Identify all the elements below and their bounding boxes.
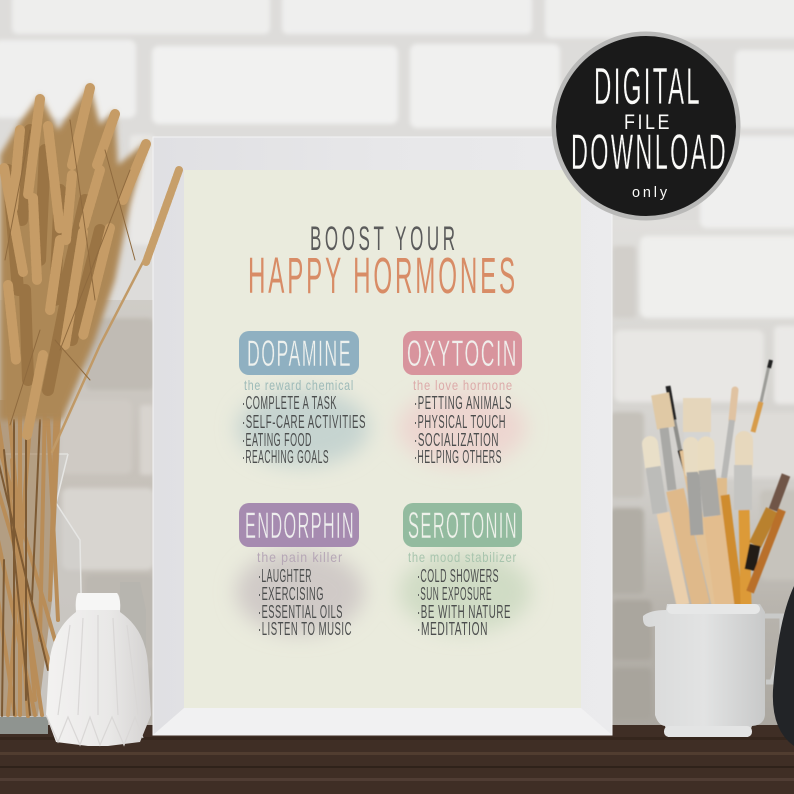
panel: dopamine: ·SELF-CARE ACTIVITIES [242, 412, 366, 432]
panel: dopamine: the reward chemical [244, 377, 354, 393]
panel: dopamine [239, 331, 366, 467]
panel: endorphin [239, 503, 359, 639]
panel: oxytocin: ·SOCIALIZATION [414, 430, 499, 450]
blurred colour blobs [236, 390, 531, 634]
badge: digital file download: FILE [624, 111, 672, 134]
dark vase [773, 586, 794, 746]
panel: oxytocin: ·HELPING OTHERS [414, 447, 502, 467]
panel: oxytocin: ·PHYSICAL TOUCH [414, 412, 506, 432]
panel: serotonin [403, 503, 522, 639]
panel: dopamine: ·EATING FOOD [242, 430, 312, 450]
badge: digital file download [552, 32, 740, 220]
panel: serotonin: ·SUN EXPOSURE [417, 584, 492, 604]
panel: oxytocin: the love hormone [413, 377, 513, 393]
badge: digital file download: only [632, 184, 670, 201]
glass vase [0, 454, 146, 734]
panel: serotonin: ·BE WITH NATURE [417, 602, 511, 622]
panel: endorphin: ·LAUGHTER [258, 566, 312, 586]
picture frame [153, 137, 612, 735]
panel: oxytocin [403, 331, 522, 467]
panel: dopamine: ·COMPLETE A TASK [242, 393, 337, 413]
title: Boost your: BOOST YOUR [310, 220, 459, 258]
panel: serotonin: ·MEDITATION [417, 619, 488, 639]
wheat stems [0, 262, 143, 716]
panel: serotonin: ·COLD SHOWERS [417, 566, 499, 586]
paint brushes [650, 360, 786, 605]
panel: oxytocin: OXYTOCIN [407, 333, 518, 374]
panel: endorphin: the pain killer [257, 549, 343, 565]
panel: dopamine: DOPAMINE [247, 333, 352, 374]
white jug [643, 604, 782, 737]
poster paper [184, 170, 581, 708]
poster paper: SEROTONIN [408, 505, 518, 546]
white ceramic vase [46, 593, 151, 746]
panel: endorphin: ·LISTEN TO MUSIC [258, 619, 352, 639]
panel: dopamine: ·REACHING GOALS [242, 447, 329, 467]
wooden shelf [0, 725, 794, 794]
poster paper: ENDORPHIN [245, 505, 355, 546]
panel: endorphin: ·ESSENTIAL OILS [258, 602, 343, 622]
panel: oxytocin: ·PETTING ANIMALS [414, 393, 512, 413]
panel: endorphin: ·EXERCISING [258, 584, 324, 604]
wheat ears [0, 84, 179, 435]
panel: serotonin: the mood stabilizer [408, 549, 517, 565]
